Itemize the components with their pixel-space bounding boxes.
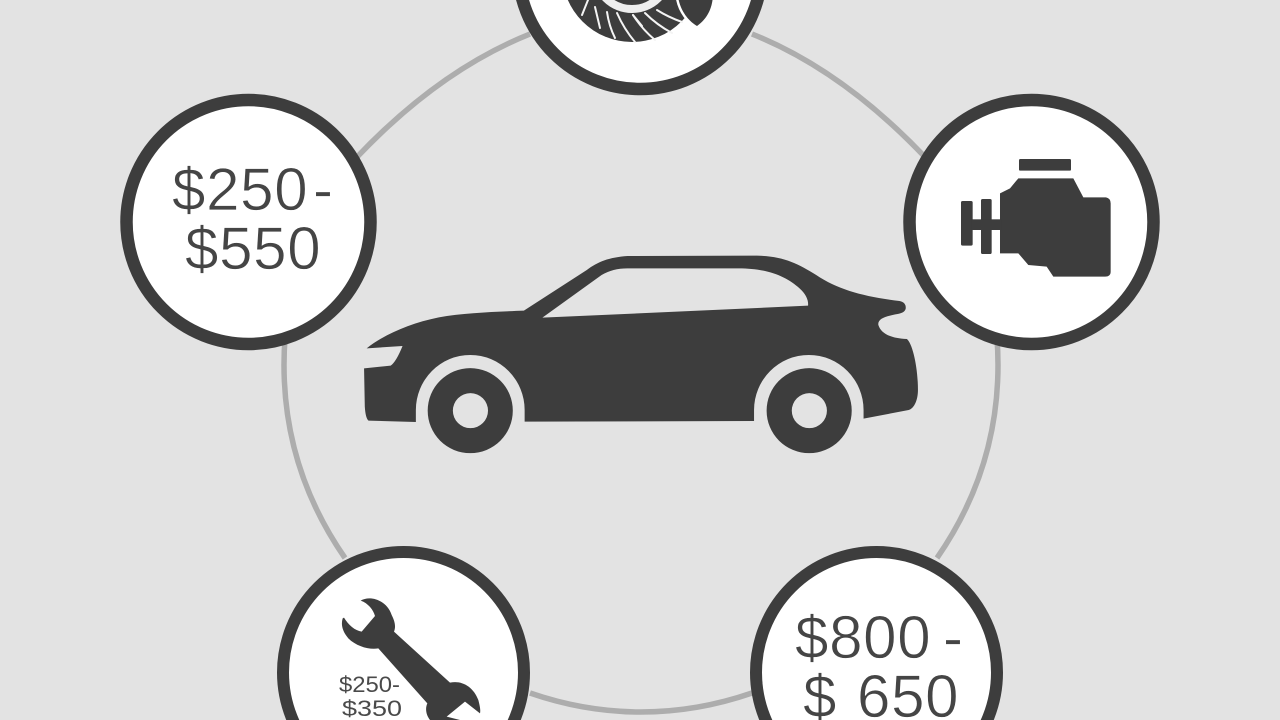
panel: engine node <box>910 100 1154 344</box>
panel: brake disc node <box>518 0 762 89</box>
icon: wrench <box>342 598 480 720</box>
icon: engine <box>961 159 1111 277</box>
price text: $800 - $650: $800 <box>795 604 931 671</box>
price text: $250 - $550: - <box>313 156 334 223</box>
connecting ring <box>284 34 998 712</box>
icon: brake disc and caliper <box>562 0 713 42</box>
front wheel <box>767 368 852 453</box>
panel: price node left <box>126 100 370 344</box>
price text: $250 - $550: $250 <box>172 156 308 223</box>
price text: $250 - $550: $550 <box>185 215 321 282</box>
panel: price node right <box>756 552 997 720</box>
panel: wrench node <box>283 552 524 720</box>
small price text: $250- <box>339 672 400 697</box>
icon: car silhouette <box>364 256 918 453</box>
rear wheel <box>428 368 513 453</box>
price text: $800 - $650: - <box>943 604 964 671</box>
